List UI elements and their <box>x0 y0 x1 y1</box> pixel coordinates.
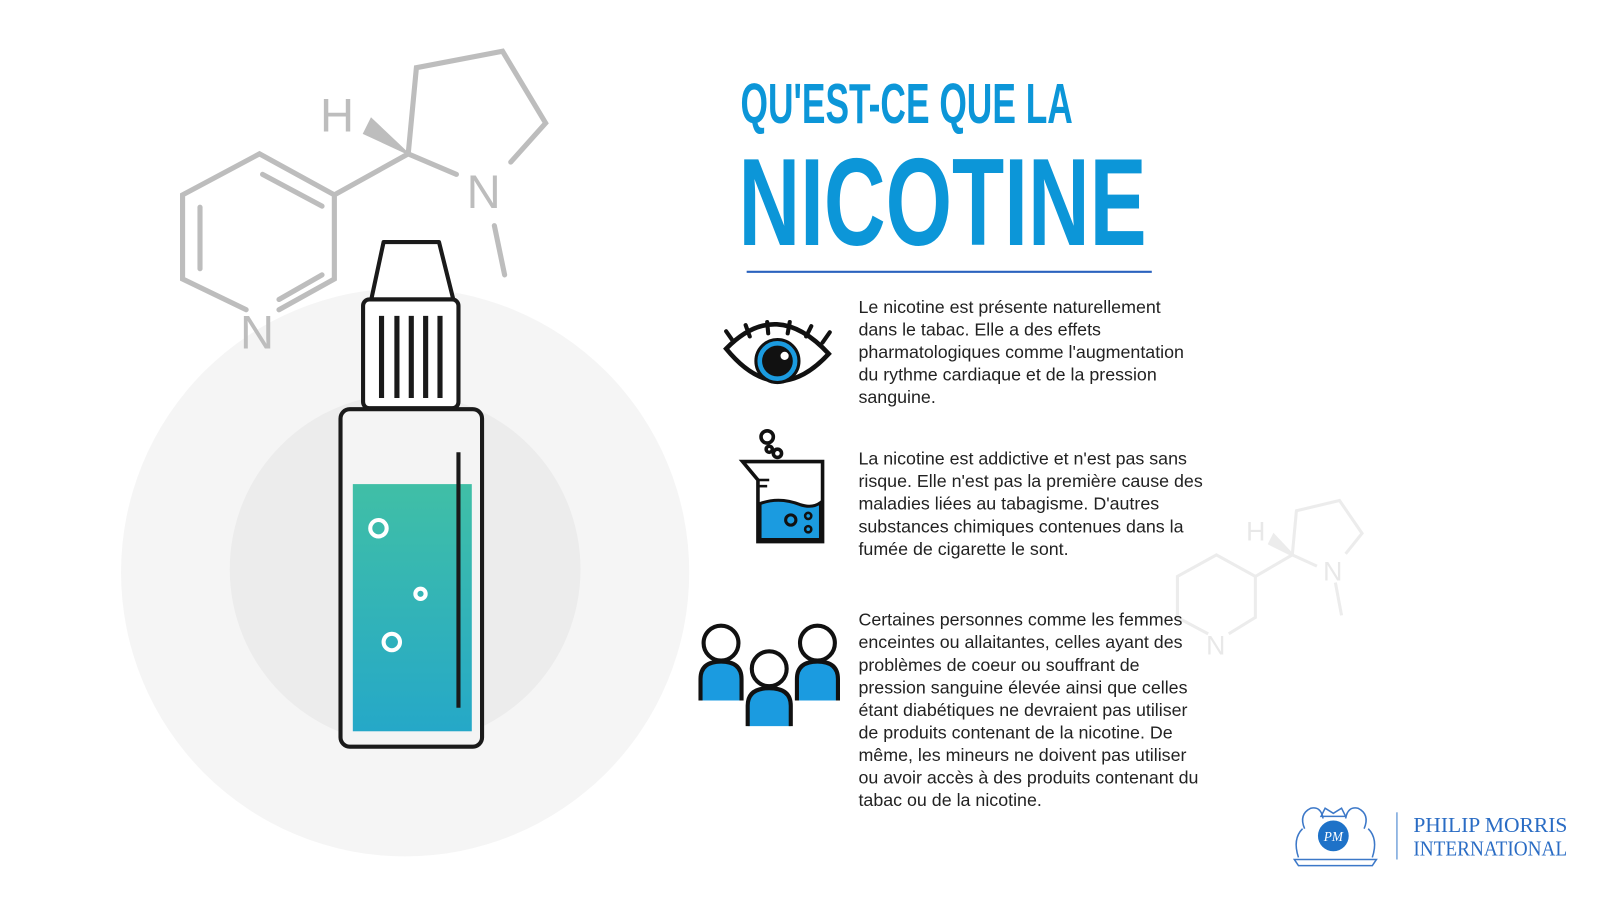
text block 1: du rythme cardiaque et de la pression <box>858 365 1157 385</box>
logo: Philip Morris International: INTERNATIONAL <box>1413 836 1567 860</box>
icon: eye <box>726 322 830 383</box>
text block 3: ou avoir accès à des produits contenant du <box>858 768 1198 788</box>
icon: people <box>701 626 838 726</box>
faint molecule right <box>1177 501 1362 660</box>
molecule: nicotine structure <box>183 51 546 359</box>
text block 3: étant diabétiques ne devraient pas utiliser <box>858 700 1188 720</box>
text block 1 <box>858 297 1184 407</box>
text block 2: substances chimiques contenues dans la <box>858 516 1184 536</box>
text block 3: même, les mineurs ne doivent pas utiliser <box>858 745 1187 765</box>
text block 2: risque. Elle n'est pas la première cause des <box>858 471 1203 491</box>
bottle <box>341 242 482 747</box>
text block 3: Certaines personnes comme les femmes <box>858 610 1183 630</box>
molecule: nicotine structure: H <box>320 88 354 141</box>
molecule: nicotine structure: N <box>240 306 274 359</box>
text block 1: Le nicotine est présente naturellement <box>858 297 1161 317</box>
text block 2: maladies liées au tabagisme. D'autres <box>858 494 1159 514</box>
faint molecule right: N <box>1206 630 1225 660</box>
title: QU'EST-CE QUE LA <box>741 72 1073 135</box>
text block 2: La nicotine est addictive et n'est pas sans <box>858 449 1187 469</box>
logo: Philip Morris International: PHILIP MORRIS <box>1413 813 1567 837</box>
text block 1: dans le tabac. Elle a des effets <box>858 319 1101 339</box>
molecule: nicotine structure: N <box>467 165 501 218</box>
logo: Philip Morris International: PM <box>1323 829 1344 844</box>
faint molecule right: H <box>1246 517 1265 547</box>
logo: Philip Morris International <box>1294 808 1567 866</box>
text block 3: enceintes ou allaitantes, celles ayant des <box>858 632 1183 652</box>
icon: beaker <box>743 431 823 542</box>
faint molecule right: N <box>1323 557 1342 587</box>
background circles <box>121 288 689 856</box>
text block 2 <box>858 449 1203 559</box>
text block 3 <box>858 610 1198 810</box>
text block 3: tabac ou de la nicotine. <box>858 790 1042 810</box>
text block 3: pression sanguine élevée ainsi que celles <box>858 677 1188 697</box>
text block 3: de produits contenant de la nicotine. De <box>858 722 1173 742</box>
divider <box>747 271 1152 273</box>
text block 3: problèmes de coeur ou souffrant de <box>858 655 1140 675</box>
title: NICOTINE <box>738 134 1147 272</box>
text block 2: fumée de cigarette le sont. <box>858 539 1069 559</box>
text block 1: pharmatologiques comme l'augmentation <box>858 342 1184 362</box>
text block 1: sanguine. <box>858 387 936 407</box>
title <box>738 72 1147 272</box>
